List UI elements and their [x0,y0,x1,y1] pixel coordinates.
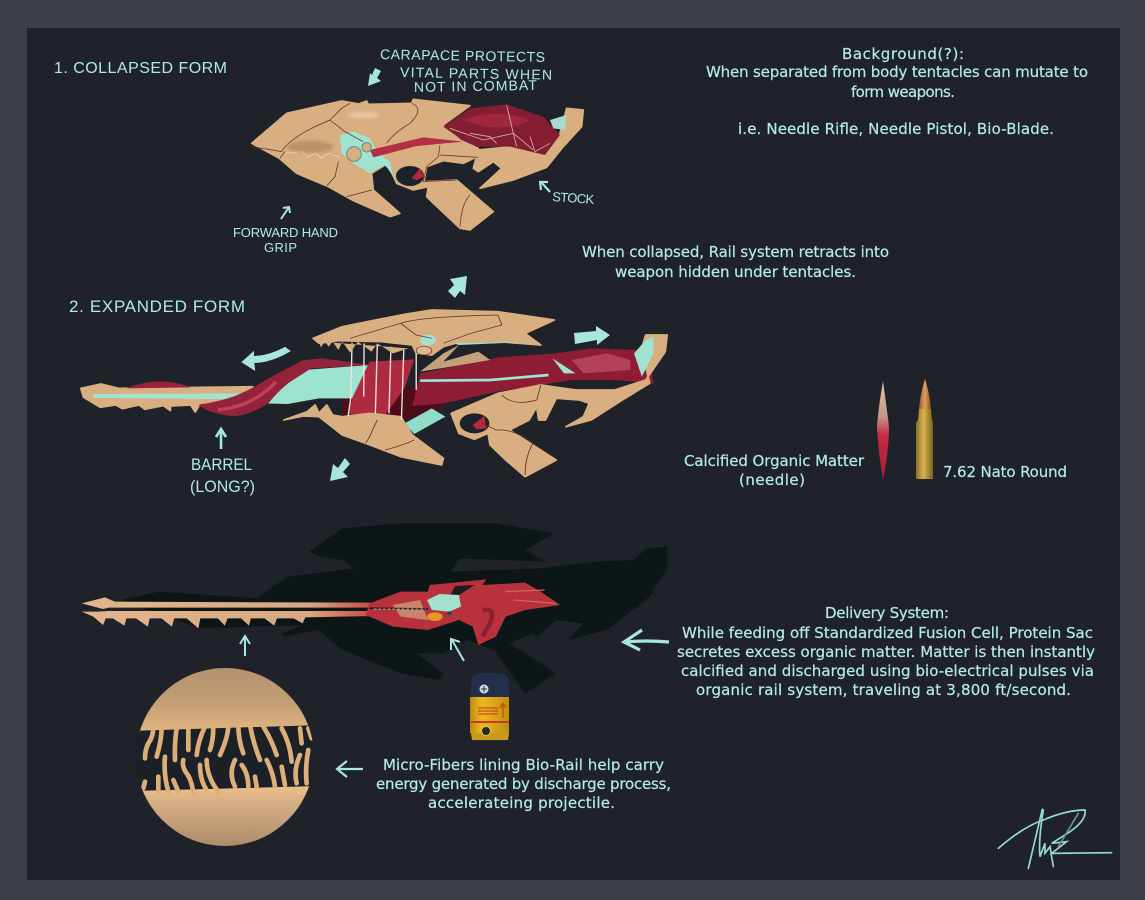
organic rail red body [366,579,560,645]
shadow silhouette [121,523,667,693]
expanded: rear red muscle [412,342,654,406]
annotation: forward hand grip: GRIP [264,240,297,255]
text: micro-fibers: Micro-Fibers lining Bio-Rail help carry [383,756,664,774]
arrow: down left [330,458,350,481]
signature [998,809,1112,868]
rail: bottom with barbs [82,611,373,628]
text: delivery system: organic rail system, traveling at 3,800 ft/second. [696,681,1071,699]
text: background: i.e. Needle Rifle, Needle Pistol, Bio-Blade. [738,120,1054,138]
collapsed: carapace body [252,99,493,230]
annotation: carapace: NOT IN COMBAT [414,77,537,95]
collapsed: red tube [370,137,463,157]
expanded: dark interior shading [342,383,459,420]
annotation: barrel: BARREL [191,455,252,474]
text: delivery system: Delivery System: [825,604,949,622]
shadow weapon with rail system [82,523,667,693]
text: micro-fibers: energy generated by discharge process, [376,775,671,793]
expanded: carapace cracks [350,315,541,475]
fusion cell battery [470,673,509,741]
text: rail collapse note [582,243,889,281]
heading: expanded form: 2. EXPANDED FORM [69,297,245,316]
collapsed: trigger guard opening [396,166,424,186]
annotation: carapace: VITAL PARTS WHEN [400,64,552,83]
expanded: barrel [81,384,253,412]
expanded: teal core [264,365,370,404]
arrow: right [574,326,610,345]
dark gap [130,725,320,791]
collapsed: red protein sac [443,104,560,155]
arrow: to sac [451,639,464,661]
arrow: up right expansion [448,276,467,298]
expanded: upper carapace [313,310,554,355]
arrow: barrel up [216,429,226,449]
labels: ammunition [684,452,1067,489]
annotation: barrel [190,455,255,496]
rail: top [82,597,373,609]
labels: ammunition: (needle) [739,471,805,489]
text: micro-fibers: accelerateing projectile. [428,794,615,812]
annotation: carapace [380,46,552,95]
expanded: center muscle [348,359,414,415]
text: delivery system: secretes excess organic matter. Matter is then instantly [677,643,1095,661]
text: background: When separated from body tentacles can mutate to [706,63,1088,81]
text: delivery system: While feeding off Standardized Fusion Cell, Protein Sac [682,624,1093,642]
annotation: stock: STOCK [552,189,595,207]
expanded weapon illustration [81,310,667,477]
text: rail collapse note: weapon hidden under tentacles. [615,263,856,281]
annotation: barrel: (LONG?) [190,477,255,496]
labels: ammunition: 7.62 Nato Round [943,463,1067,481]
annotation: carapace: CARAPACE PROTECTS [380,46,545,65]
collapsed weapon illustration [252,99,583,230]
annotation: forward hand grip: FORWARD HAND [233,225,338,240]
arrow: forward hand grip [281,207,290,219]
annotation: forward hand grip [233,225,338,255]
collapsed: teal core [340,132,398,187]
text: micro-fibers [376,756,671,812]
text: delivery system [677,604,1095,699]
arrow: to micro-fibers [240,636,250,656]
arrow: stock [540,182,550,192]
text: rail collapse note: When collapsed, Rail system retracts into [582,243,889,261]
teal crystal [427,594,461,612]
collapsed: stock [473,108,583,188]
text: delivery system: calcified and discharged using bio-electrical pulses via [681,662,1094,680]
fibers [143,725,312,793]
collapsed: white veins [450,105,550,152]
expanded: strands and teeth [348,343,416,420]
arrow: carapace [368,68,381,86]
bottom band [140,786,310,846]
arrow: circle detail [337,761,363,777]
expanded: lower front jaw [284,405,443,465]
orange sac [427,612,443,621]
text: background [706,45,1088,138]
top band [139,668,311,733]
text: background: Background(?): [842,45,964,63]
needle [877,381,889,480]
micro-fiber circle detail [139,668,312,846]
expanded: rear body and grip [451,335,667,477]
arrow: curved left [243,348,289,369]
text: background: form weapons. [851,83,955,101]
expanded: red barrel muscle [198,358,370,416]
labels: ammunition: Calcified Organic Matter [684,452,865,470]
heading: collapsed form: 1. COLLAPSED FORM [54,60,227,77]
expanded: trigger opening [460,413,489,433]
collapsed: carapace cracks [252,103,478,227]
bullet [916,379,933,479]
arrow: delivery system [624,630,669,650]
